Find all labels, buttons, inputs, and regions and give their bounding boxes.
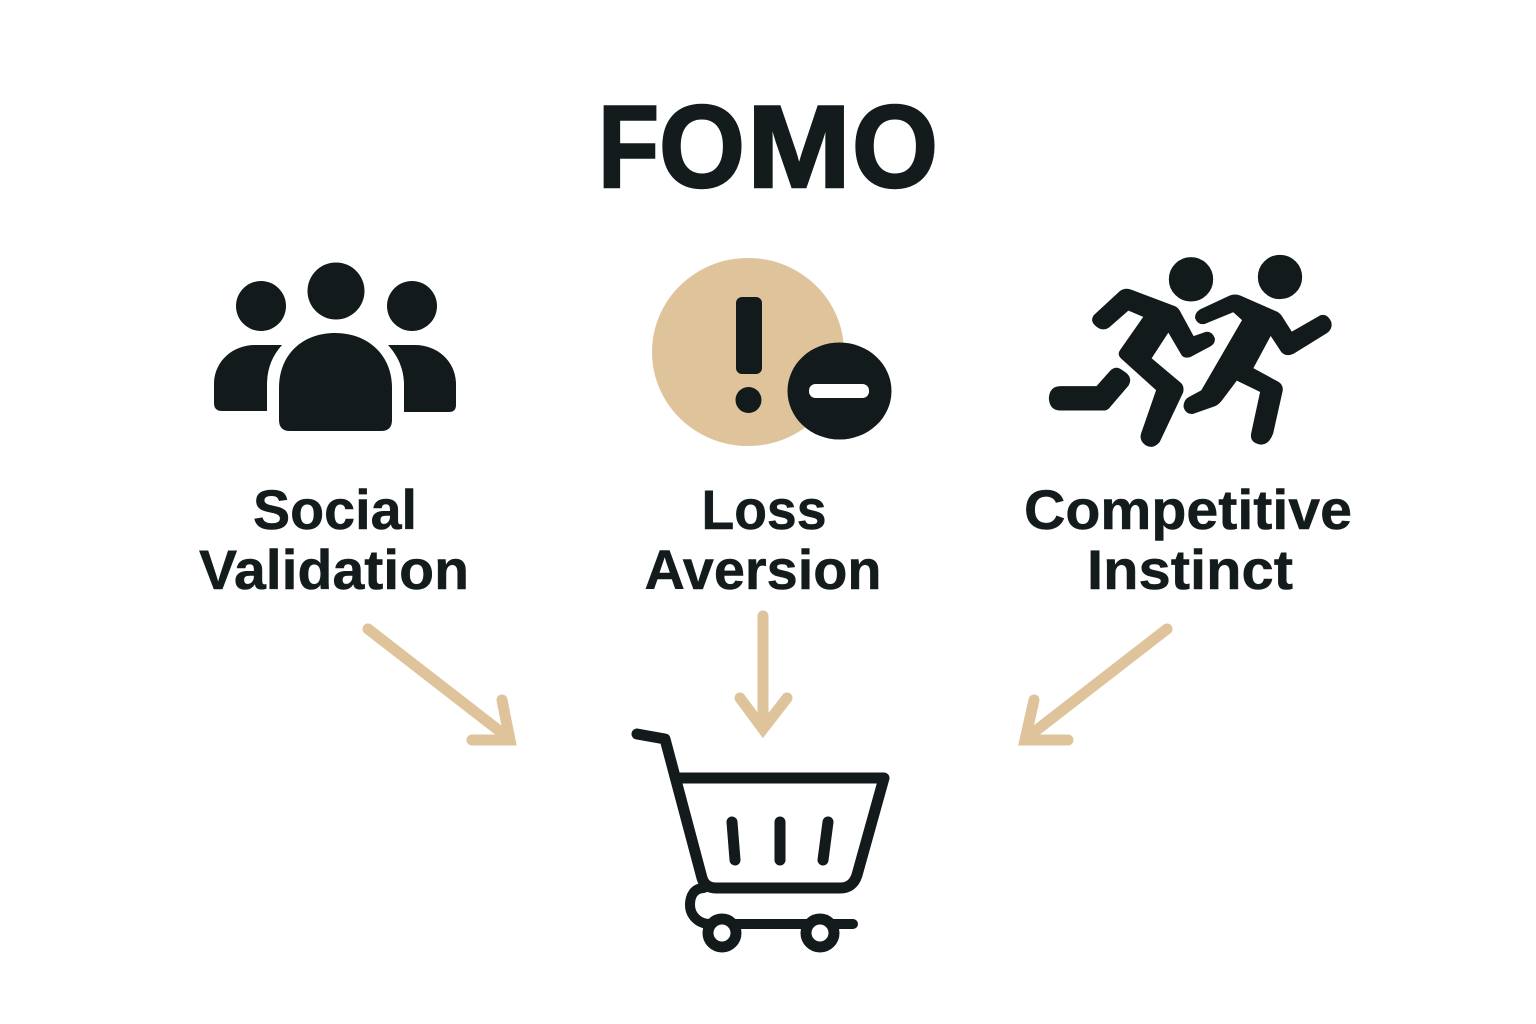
label: competitive instinct: Competitive [1024,478,1352,541]
arrow: left [368,629,510,740]
icon: shopping cart [637,734,884,947]
label: social validation: Social [253,478,417,541]
title: O [659,81,745,212]
arrow: right [1025,629,1167,740]
label: loss aversion: Loss [702,478,826,541]
title: M [747,81,851,212]
label: competitive instinct: Instinct [1087,538,1293,601]
icon: competitive runners [1049,255,1331,446]
title [598,81,938,212]
label: competitive instinct [1024,478,1352,601]
arrow: center [740,616,787,729]
icon: loss aversion warning [652,258,892,446]
title: O [852,81,938,212]
label: loss aversion [644,478,882,601]
title: F [598,81,659,212]
icon: social validation group [214,262,456,431]
label: loss aversion: Aversion [644,538,882,601]
label: social validation [199,478,469,601]
label: social validation: Validation [199,538,469,601]
